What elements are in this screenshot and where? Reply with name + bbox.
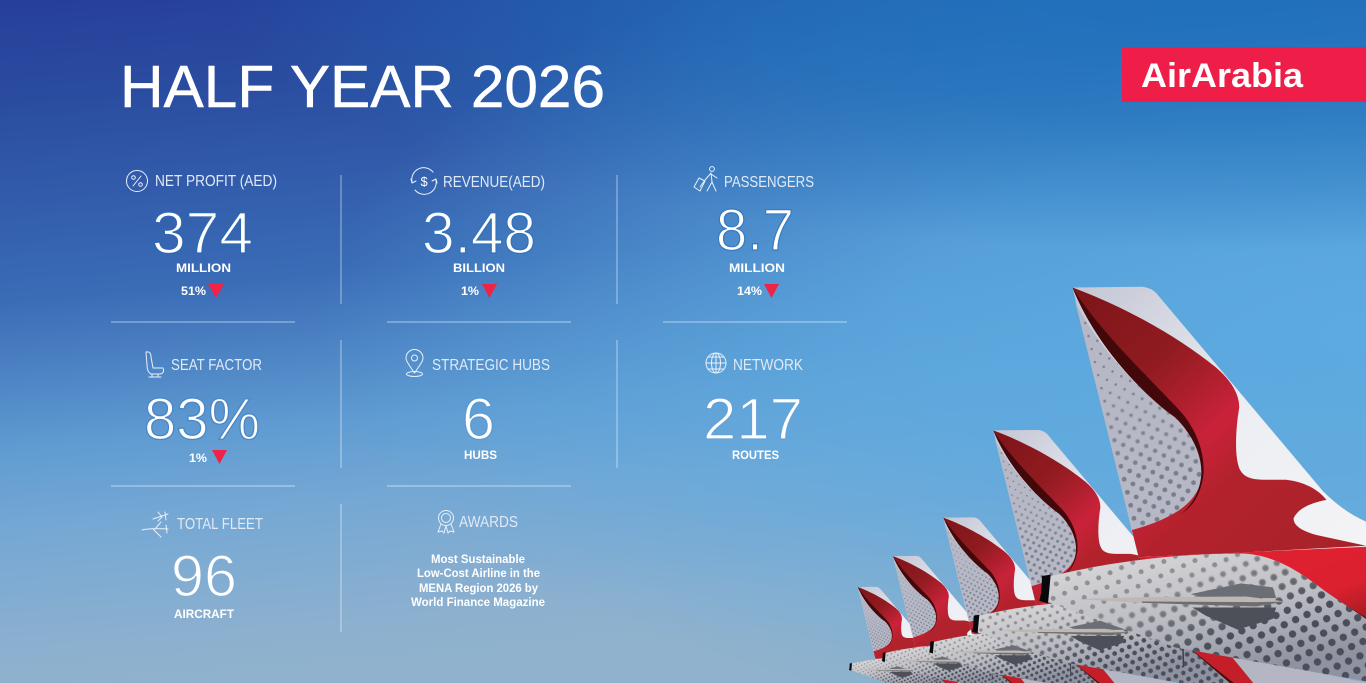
award description: Most Sustainable bbox=[431, 554, 525, 566]
value: 374: 374 bbox=[152, 201, 253, 266]
tail: largest aircraft bbox=[1038, 283, 1366, 683]
panel: network bbox=[703, 353, 803, 462]
award description: MENA Region 2026 by bbox=[419, 583, 539, 595]
label: total fleet: TOTAL FLEET bbox=[177, 516, 263, 533]
panel: awards bbox=[411, 510, 545, 609]
icon: traveller with suitcase bbox=[694, 167, 717, 191]
value: 3.48: 3.48 bbox=[422, 201, 536, 266]
unit: hubs: HUBS bbox=[464, 448, 497, 462]
panel: total fleet bbox=[142, 512, 263, 621]
label: strategic hubs: STRATEGIC HUBS bbox=[432, 357, 550, 374]
award description: Low-Cost Airline in the bbox=[417, 568, 540, 580]
title: HALF YEAR 2026 bbox=[120, 54, 605, 120]
label: passengers: PASSENGERS bbox=[724, 174, 814, 191]
icon: map pin bbox=[406, 350, 423, 376]
icon: percent circle bbox=[126, 170, 148, 192]
label: net profit: NET PROFIT (AED) bbox=[155, 173, 277, 190]
change: 1% down: 1% bbox=[189, 453, 207, 465]
unit: billion: BILLION bbox=[453, 261, 505, 275]
panel: strategic hubs bbox=[406, 350, 550, 462]
icon: seat bbox=[146, 352, 164, 377]
tail: second aircraft bbox=[971, 428, 1366, 683]
unit: million: MILLION bbox=[176, 261, 231, 275]
change: 51% down: 51% bbox=[181, 286, 206, 298]
icon: rosette bbox=[438, 510, 454, 533]
change: 1% down: 1% bbox=[461, 286, 479, 298]
unit: routes: ROUTES bbox=[732, 448, 779, 462]
label: seat factor: SEAT FACTOR bbox=[171, 357, 262, 374]
change: 14% down: 14% bbox=[737, 286, 762, 298]
unit: million: MILLION bbox=[729, 261, 785, 275]
panel: seat factor bbox=[144, 352, 262, 465]
tail: fourth aircraft bbox=[881, 555, 1088, 683]
label: awards: AWARDS bbox=[459, 514, 518, 531]
icon: two aircraft bbox=[142, 512, 168, 537]
value: 96: 96 bbox=[171, 544, 237, 609]
logo: Air Arabia bbox=[1122, 47, 1366, 102]
logo: Air Arabia: AirArabia bbox=[1141, 57, 1304, 95]
label: network: NETWORK bbox=[733, 357, 803, 374]
panel: passengers bbox=[694, 167, 814, 298]
panel: revenue bbox=[411, 168, 545, 298]
value: 6: 6 bbox=[462, 387, 495, 452]
value: 8.7: 8.7 bbox=[716, 198, 794, 263]
change: 51% down bbox=[181, 284, 224, 298]
aircraft tails illustration bbox=[849, 283, 1366, 683]
unit: aircraft: AIRCRAFT bbox=[174, 607, 235, 621]
award description: World Finance Magazine bbox=[411, 597, 545, 609]
panel: net profit bbox=[126, 170, 277, 298]
award description bbox=[411, 554, 545, 609]
tail: third aircraft bbox=[929, 516, 1194, 683]
value: 217: 217 bbox=[703, 387, 803, 452]
label: revenue: REVENUE(AED) bbox=[443, 174, 545, 191]
icon: globe bbox=[706, 353, 726, 373]
value: 83%: 83% bbox=[144, 387, 260, 452]
tail: smallest aircraft bbox=[849, 586, 1012, 683]
icon: revenue dollar cycle: $ bbox=[420, 174, 428, 189]
